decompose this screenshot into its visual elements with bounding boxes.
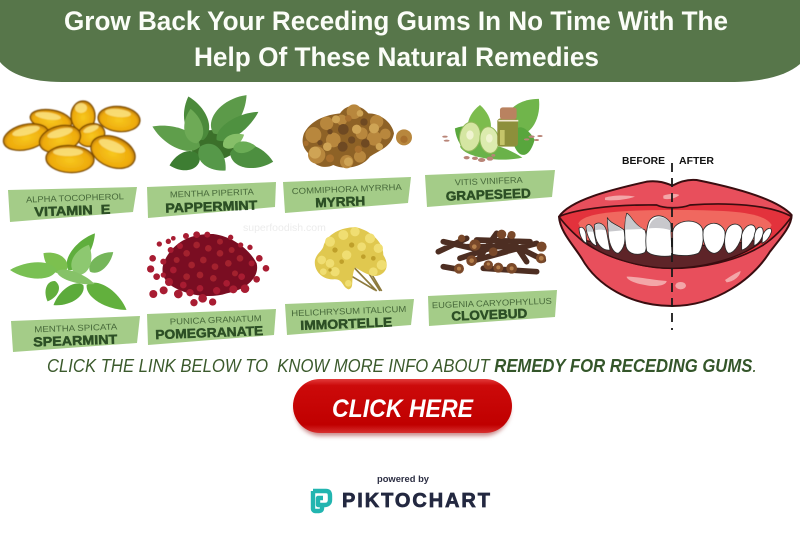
label: peppermint: MENTHA PIPERITA <box>170 187 254 199</box>
label: clovebud: CLOVEBUD <box>451 306 528 324</box>
panel: spearmint <box>10 228 140 352</box>
call to action text: CLICK THE LINK BELOW TO KNOW MORE INFO ABOUT REMEDY FOR RECEDING GUMS. <box>47 356 757 376</box>
icon: myrrh resin pieces <box>303 104 412 168</box>
label: grapeseed: GRAPESEED <box>445 185 531 204</box>
label: vitamin E: VITAMIN E <box>34 202 111 219</box>
before label: BEFORE <box>622 156 665 167</box>
panel: vitamin E <box>1 101 141 222</box>
before/after dashed divider <box>671 163 673 330</box>
lip highlights <box>605 194 741 289</box>
title: Grow Back Your Receding Gums In No Time With The <box>64 6 728 36</box>
title <box>64 6 728 72</box>
lips <box>559 180 792 306</box>
powered by piktochart logo: powered by <box>377 474 430 485</box>
panel: immortelle <box>285 227 414 335</box>
panel: before and after mouth <box>559 156 792 330</box>
upper gum <box>559 204 792 268</box>
button: click here: CLICK HERE <box>332 395 474 423</box>
icon: clove buds <box>438 230 547 274</box>
label: peppermint: PAPPERMINT <box>165 197 258 216</box>
label: immortelle <box>285 299 414 335</box>
label: vitamin E: ALPHA TOCOPHEROL <box>26 191 124 205</box>
panel: peppermint <box>147 87 276 218</box>
icon: pomegranate seeds <box>147 231 269 306</box>
powered by piktochart logo: PIKTOCHART <box>342 490 490 512</box>
label: spearmint <box>11 316 140 352</box>
label: pomegranate: PUNICA GRANATUM <box>170 313 262 327</box>
icon: vitamin E capsules <box>1 101 141 175</box>
after label: AFTER <box>679 156 715 167</box>
panel: myrrh <box>283 104 412 213</box>
header banner <box>0 0 800 82</box>
label: clovebud: EUGENIA CARYOPHYLLUS <box>432 296 552 310</box>
label: spearmint: MENTHA SPICATA <box>34 322 118 334</box>
icon: peppermint leaves <box>148 87 276 178</box>
powered by piktochart logo <box>313 474 490 512</box>
label: pomegranate: POMEGRANATE <box>155 323 264 342</box>
icon: spearmint leaves <box>10 228 131 317</box>
healthy teeth <box>673 221 772 256</box>
label: myrrh: COMMIPHORA MYRRHA <box>292 182 402 196</box>
icon: immortelle flowers <box>315 227 387 291</box>
label: grapeseed <box>425 170 555 207</box>
icon: piktochart logo <box>313 491 330 511</box>
label: pomegranate <box>147 309 276 345</box>
label: peppermint <box>147 182 276 218</box>
title: Help Of These Natural Remedies <box>194 42 599 72</box>
exposed tooth roots <box>587 214 671 232</box>
panel: pomegranate <box>147 231 276 345</box>
label: myrrh <box>283 177 411 213</box>
label: spearmint: SPEARMINT <box>33 332 118 349</box>
panel: grapeseed <box>425 89 555 207</box>
icon: grapes, seed oil and vine leaves <box>442 89 549 165</box>
watermark: superfoodish.com <box>243 222 326 234</box>
label: clovebud <box>428 290 557 326</box>
panel: clovebud <box>428 230 557 326</box>
inner mouth <box>583 238 765 268</box>
label: immortelle: IMMORTELLE <box>300 314 393 333</box>
label: grapeseed: VITIS VINIFERA <box>455 175 523 187</box>
label: myrrh: MYRRH <box>315 193 366 210</box>
button: click here <box>293 379 512 436</box>
label: immortelle: HELICHRYSUM ITALICUM <box>291 304 406 318</box>
receded teeth <box>579 213 672 256</box>
icon: mouth illustration <box>559 180 792 306</box>
label: vitamin E <box>8 187 137 222</box>
